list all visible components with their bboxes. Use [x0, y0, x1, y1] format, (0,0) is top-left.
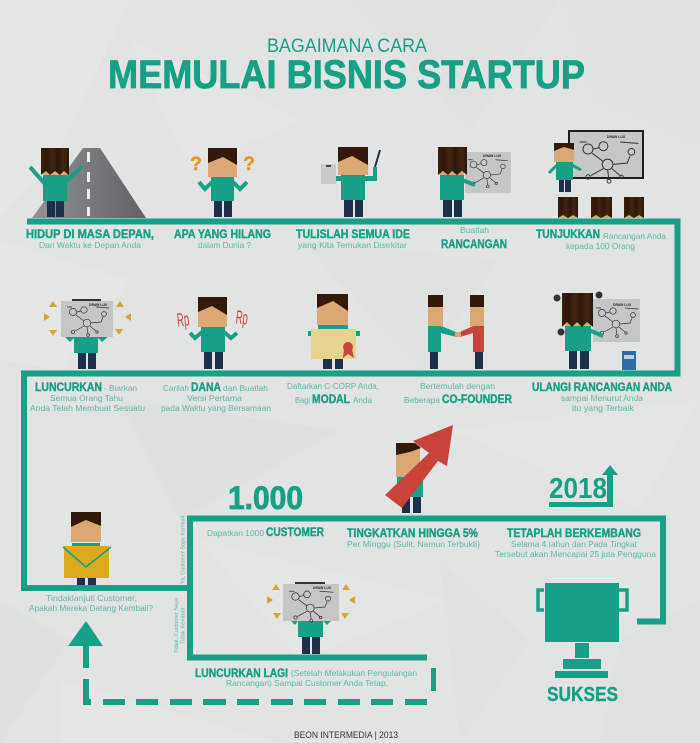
- step 8 text: Anda: [353, 395, 372, 405]
- step 7 text: Carilah: [163, 383, 189, 393]
- step 6 text: Semua Orang Tahu: [50, 393, 123, 403]
- step 13 illustration: person carrying red arrow: [385, 425, 453, 513]
- step 14 text: Tersebut akan Mencapai 25 juta Pengguna: [495, 549, 656, 559]
- branch label: yes: Ya, Customer Saya Kembali: [180, 516, 186, 584]
- icon: trophy: [538, 583, 627, 678]
- icon: pen: [375, 150, 380, 167]
- step 11 text: [29, 593, 153, 613]
- icon: question marks: [190, 154, 255, 175]
- branch label: no: [174, 598, 186, 653]
- icon: question marks: ?: [190, 154, 202, 175]
- step 5 text: TUNJUKKAN: [536, 229, 600, 241]
- audience heads: [558, 197, 644, 218]
- step 8 text: MODAL: [312, 394, 350, 406]
- icon: red arrow: [385, 425, 453, 508]
- step 1 text: HIDUP DI MASA DEPAN,: [26, 229, 154, 241]
- step 5 text: kepada 100 Orang: [566, 241, 635, 251]
- footer credit: BEON INTERMEDIA | 2013: [294, 730, 398, 740]
- step 12 text: [207, 527, 325, 539]
- step 9 text: [404, 381, 513, 406]
- icon: blue book: [622, 351, 636, 370]
- number: 2018 with arrow: 2018: [549, 473, 607, 505]
- icon: Rp symbols: Rp: [235, 307, 249, 330]
- step 2 illustration: person with question marks: [190, 148, 255, 217]
- dashed return arrow: [68, 621, 436, 705]
- step 2 text: [174, 229, 271, 250]
- step 15 illustration: relaunch, person behind board: [267, 582, 355, 654]
- step 10 text: [532, 382, 672, 413]
- step 7 text: Versi Pertama: [187, 393, 242, 403]
- icon: orange sparks: [44, 301, 131, 336]
- step 15 text: LUNCURKAN LAGI: [195, 668, 288, 680]
- step 4 text: Buatlah: [460, 225, 489, 235]
- step 3 illustration: person with clipboard and pen: [321, 147, 380, 217]
- step 8 illustration: person with certificate: [308, 294, 360, 369]
- title: [108, 36, 585, 97]
- sketch board: DRAW LUX: [613, 303, 632, 307]
- step 2 text: APA YANG HILANG: [174, 229, 271, 241]
- sketch board: DRAW LUX: [89, 303, 108, 307]
- step 1 text: [26, 229, 154, 250]
- presentation screen: DRAW LUX: [607, 135, 626, 139]
- step 4 illustration: person and sketch board: [438, 147, 511, 217]
- step 15 text: [195, 668, 417, 688]
- left person: [428, 295, 456, 369]
- icon: clipboard: [321, 164, 336, 184]
- step 9 text: Beberapa: [404, 395, 440, 405]
- step 5 text: [536, 229, 666, 251]
- step 13 text: Per Minggu (Sulit, Namun Terbukti): [347, 539, 480, 549]
- step 9 illustration: handshake: [428, 295, 484, 369]
- figure: person from behind, arms raised: [30, 148, 82, 217]
- step 7 text: [161, 382, 271, 413]
- step 1 illustration: figure and road: [30, 148, 146, 218]
- step 12 text: Dapatkan 1000: [207, 528, 264, 538]
- step 3 text: yang Kita Temukan Disekitar: [298, 240, 407, 250]
- icon: Rp symbols: [176, 307, 249, 332]
- step 13 text: [347, 528, 480, 549]
- sketch board: DRAW LUX: [313, 586, 332, 590]
- certificate: [308, 329, 360, 359]
- step 5 text: Rancangan Anda: [603, 231, 666, 241]
- step 10 text: ULANGI RANCANGAN ANDA: [532, 382, 672, 394]
- number: 1.000: 1.000: [228, 480, 303, 516]
- step 2 text: dalam Dunia ?: [198, 240, 251, 250]
- step 6 text: LUNCURKAN: [35, 382, 102, 394]
- step 8 text: Bagi: [295, 395, 310, 405]
- step 10 text: sampai Menurut Anda: [561, 393, 643, 403]
- step 6 text: Anda Telah Membuat Sesuatu: [30, 403, 145, 413]
- step 11 text: Apakah Mereka Datang Kembali?: [29, 603, 153, 613]
- step 6 text: - Biarkan: [104, 383, 137, 393]
- step 5 illustration: presenter and audience: [549, 130, 644, 218]
- step 7 text: DANA: [191, 382, 221, 394]
- step 9 text: CO-FOUNDER: [442, 394, 513, 406]
- right person: [460, 295, 484, 369]
- step 7 text: pada Waktu yang Bersamaan: [161, 403, 271, 413]
- step 7 illustration: person with Rp: [176, 297, 249, 369]
- step 10 text: itu yang Terbaik: [572, 403, 635, 413]
- icon: scribbles: [554, 292, 602, 336]
- presenter: [549, 143, 581, 192]
- icon: road: [32, 148, 146, 218]
- icon: Rp symbols: Rp: [176, 309, 190, 332]
- step 13 text: TINGKATKAN HINGGA 5%: [347, 528, 478, 540]
- step 15 text: Rancangan) Sampai Customer Anda Tetap.: [226, 678, 388, 688]
- icon: question marks: ?: [243, 154, 255, 175]
- path line: main route: [24, 222, 678, 658]
- step 14 text: [495, 528, 656, 559]
- main title: MEMULAI BISNIS STARTUP: [108, 53, 585, 97]
- step 4 text: [441, 225, 507, 251]
- step 12 text: CUSTOMER: [266, 527, 325, 539]
- step 7 text: dan Buatlah: [223, 383, 268, 393]
- sketch board: DRAW LUX: [483, 154, 502, 158]
- step 15 text: (Setelah Melakukan Pengulangan: [291, 668, 417, 678]
- icon: orange sparks: [267, 584, 355, 619]
- label: sukses: SUKSES: [547, 684, 618, 706]
- step 3 text: TULISLAH SEMUA IDE: [296, 229, 410, 241]
- branch label: no: Tidak, Customer Saya: [174, 598, 180, 653]
- branch label: no: Tidak Kembali: [180, 608, 186, 644]
- step 8 text: [287, 381, 379, 406]
- step 4 text: RANCANGAN: [441, 239, 507, 251]
- step 8 text: Daftarkan C-CORP Anda,: [287, 381, 379, 391]
- step 6 text: [30, 382, 145, 413]
- step 11 illustration: person with yellow bag: [63, 512, 111, 585]
- step 1 text: Dari Waktu ke Depan Anda: [39, 240, 141, 250]
- step 10 illustration: person iterating, board and book: [554, 292, 640, 370]
- subtitle: BAGAIMANA CARA: [267, 36, 427, 57]
- step 9 text: Bertemulah dengan: [420, 381, 495, 391]
- step 3 text: [296, 229, 410, 250]
- step 11 text: Tindaklanjuti Customer,: [46, 593, 137, 603]
- step 6 illustration: launch, person behind board: [44, 299, 131, 369]
- step 14 text: TETAPLAH BERKEMBANG: [507, 528, 641, 540]
- step 14 text: Selama 4 tahun dan Pada Tingkat: [511, 539, 638, 549]
